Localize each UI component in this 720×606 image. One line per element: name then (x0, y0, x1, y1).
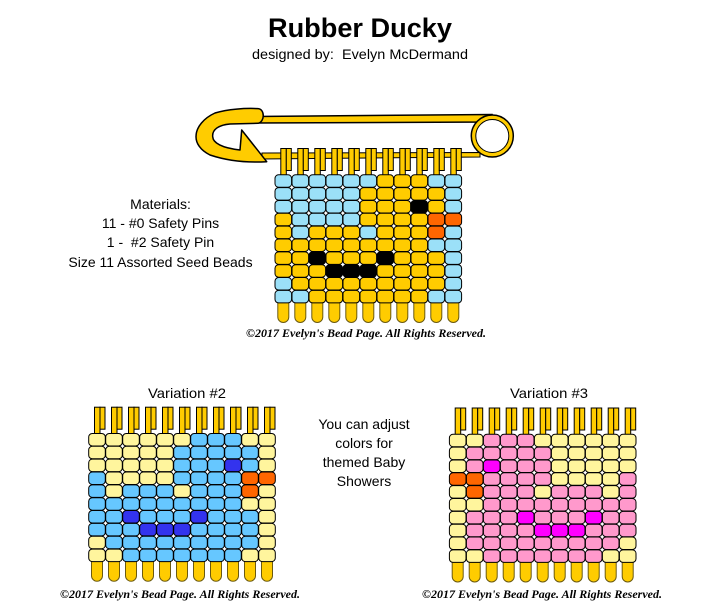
variation 3 copyright caption: ©2017 Evelyn's Bead Page. All Rights Reserved. (422, 587, 662, 601)
variation 2 copyright caption: ©2017 Evelyn's Bead Page. All Rights Reserved. (60, 587, 300, 601)
note: adjust colors: colors for (335, 435, 393, 451)
note: adjust colors: Showers (337, 473, 391, 489)
subtitle: designer credit: designed by: Evelyn McDermand (252, 46, 468, 62)
materials list: Materials: (130, 196, 191, 212)
note: adjust colors: themed Baby (323, 454, 405, 470)
materials list: 11 - #0 Safety Pins (102, 215, 219, 231)
large safety pin (196, 108, 513, 162)
variation 2 blue duck pattern (89, 407, 275, 581)
note: adjust colors (318, 416, 410, 489)
materials list (68, 196, 253, 270)
pin clasp head (196, 108, 267, 162)
materials list: 1 - #2 Safety Pin (107, 234, 214, 250)
note: adjust colors: You can adjust (318, 416, 410, 432)
variation 3 pink duck pattern (449, 408, 636, 582)
materials list: Size 11 Assorted Seed Beads (68, 254, 253, 270)
heading: variation 3: Variation #3 (510, 385, 588, 401)
main beaded duck pattern (275, 148, 462, 322)
pin ring (471, 115, 513, 157)
pin lower wire (262, 152, 480, 159)
title: Rubber Ducky (268, 13, 452, 43)
pin upper wire (255, 114, 492, 123)
heading: variation 2: Variation #2 (148, 385, 226, 401)
main copyright caption: ©2017 Evelyn's Bead Page. All Rights Reserved. (246, 326, 486, 340)
